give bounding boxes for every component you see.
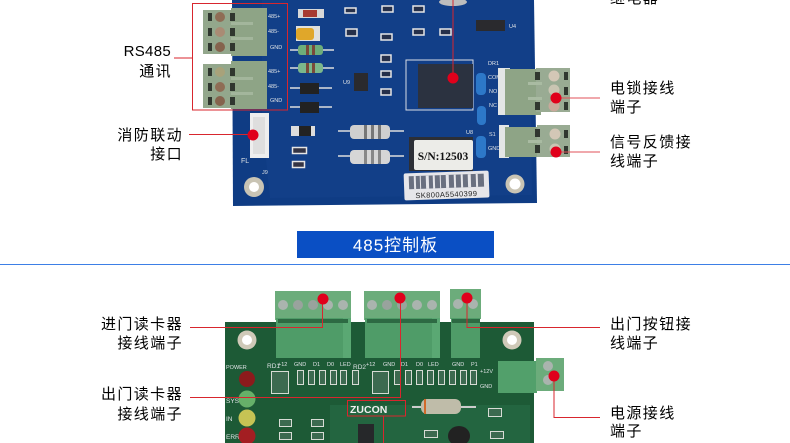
- callout line: lock terminal: [550, 92, 600, 104]
- section banner: 485控制板: [353, 236, 438, 255]
- label: fire linkage: 消防联动: [117, 127, 183, 144]
- silkscreen text: SYS: [226, 398, 240, 405]
- callout line: signal terminal: [550, 146, 600, 158]
- silkscreen text: D1: [401, 362, 408, 368]
- board silkscreen labels: GND: [488, 146, 500, 152]
- label: power terminal: 端子: [610, 423, 643, 440]
- silkscreen text: D0: [416, 362, 423, 368]
- barcode sticker: SK800A5540399: [415, 189, 477, 200]
- ZUCON red frame: [348, 400, 406, 443]
- label: power terminal: [610, 405, 676, 440]
- label: exit button terminal: 线端子: [610, 335, 659, 352]
- label: reader in terminal: 进门读卡器: [101, 316, 183, 333]
- divider: [0, 264, 790, 265]
- silkscreen text: +12V: [480, 369, 493, 375]
- board silkscreen labels: FL: [241, 158, 249, 165]
- board silkscreen labels: COM: [488, 75, 501, 81]
- small parts: [272, 370, 504, 440]
- green terminal power: [498, 358, 564, 393]
- small SMD parts: [345, 6, 451, 95]
- resistor: [412, 399, 476, 414]
- board silkscreen labels: 485+: [268, 14, 280, 20]
- board silkscreen labels: DR1: [488, 61, 499, 67]
- label: reader out terminal: 出门读卡器: [101, 386, 183, 403]
- RS485 terminal lower: [203, 61, 267, 109]
- silkscreen text: RD2: [353, 364, 366, 371]
- board silkscreen labels: J9: [262, 170, 268, 176]
- board silkscreen labels: U8: [466, 130, 473, 136]
- label: feedback terminal: [610, 134, 692, 170]
- label: reader in terminal: 接线端子: [117, 335, 183, 352]
- serial number sticker: S/N:12503: [418, 151, 468, 163]
- label: lock terminal: 端子: [610, 99, 643, 116]
- capacitor: [448, 426, 470, 443]
- RS485 callout frame and leader: [174, 4, 288, 110]
- label: feedback terminal: 信号反馈接: [610, 134, 692, 151]
- label: reader out terminal: [101, 386, 183, 423]
- silkscreen text: [226, 362, 493, 441]
- green terminal reader out: [364, 291, 440, 358]
- label: power terminal: 电源接线: [610, 405, 676, 422]
- mounting holes: [244, 174, 524, 197]
- silkscreen text: +12: [366, 362, 375, 368]
- silkscreen text: D0: [327, 362, 334, 368]
- label: reader in terminal: [101, 316, 183, 352]
- green controller board: [225, 322, 534, 443]
- barcode sticker: [404, 171, 489, 200]
- RS485 terminal upper: [203, 8, 267, 56]
- IC chip: [358, 424, 374, 443]
- silkscreen text: IN: [226, 416, 233, 423]
- board silkscreen labels: GND: [270, 45, 282, 51]
- silkscreen text: +12: [278, 362, 287, 368]
- board silkscreen labels: 485-: [268, 29, 279, 35]
- board silkscreen labels: NO: [489, 89, 498, 95]
- label: reader out terminal: 接线端子: [117, 406, 183, 423]
- label: exit button terminal: 出门按钮接: [610, 316, 692, 333]
- callout line: reader in: [190, 294, 328, 328]
- mounting holes: [238, 330, 522, 350]
- silkscreen text: LED: [340, 362, 351, 368]
- callout line: exit button: [462, 292, 600, 328]
- IC chips: [354, 0, 505, 91]
- label: exit button terminal: [610, 316, 692, 352]
- callout line: relay: [448, 0, 458, 84]
- board silkscreen labels: NC: [489, 103, 497, 109]
- blue 485 control board: [232, 0, 537, 206]
- label: lock terminal: 电锁接线: [610, 80, 676, 97]
- board silkscreen labels: [241, 14, 516, 176]
- serial number sticker: [409, 137, 473, 171]
- silkscreen text: ERR: [226, 434, 240, 441]
- label: RS485 communication: 通讯: [139, 63, 172, 80]
- board silkscreen labels: S1: [489, 132, 496, 138]
- logo: ZUCON: [350, 404, 387, 416]
- silkscreen text: LED: [428, 362, 439, 368]
- silkscreen text: POWER: [226, 365, 247, 371]
- callout line: fire link: [189, 130, 258, 140]
- board silkscreen labels: 485+: [268, 69, 280, 75]
- board silkscreen labels: U4: [509, 24, 516, 30]
- silkscreen text: GND: [452, 362, 464, 368]
- silkscreen text: RD1: [267, 363, 280, 370]
- silkscreen text: D1: [313, 362, 320, 368]
- board silkscreen labels: U9: [343, 80, 350, 86]
- silkscreen text: GND: [480, 384, 492, 390]
- green terminal reader in: [275, 291, 351, 358]
- fire link white connector: [250, 113, 269, 158]
- board silkscreen labels: 485-: [268, 84, 279, 90]
- silkscreen text: GND: [294, 362, 306, 368]
- signal terminal: [499, 125, 570, 158]
- label: lock terminal: [610, 80, 676, 116]
- label: RS485: RS485: [124, 43, 171, 60]
- lock terminal: [498, 68, 570, 115]
- blue capacitors: [476, 73, 486, 158]
- silkscreen text: P1: [471, 362, 478, 368]
- green terminal exit button: [450, 289, 481, 358]
- callout line: power: [548, 370, 600, 418]
- LEDs: [238, 371, 256, 443]
- board silkscreen labels: GND: [270, 98, 282, 104]
- section banner: [297, 231, 494, 258]
- callout line: reader out: [190, 292, 406, 398]
- diodes and resistors: [290, 9, 404, 168]
- relay: [406, 60, 473, 110]
- label: fire interface: 接口: [150, 146, 183, 163]
- silkscreen text: GND: [383, 362, 395, 368]
- label: feedback terminal: 线端子: [610, 153, 659, 170]
